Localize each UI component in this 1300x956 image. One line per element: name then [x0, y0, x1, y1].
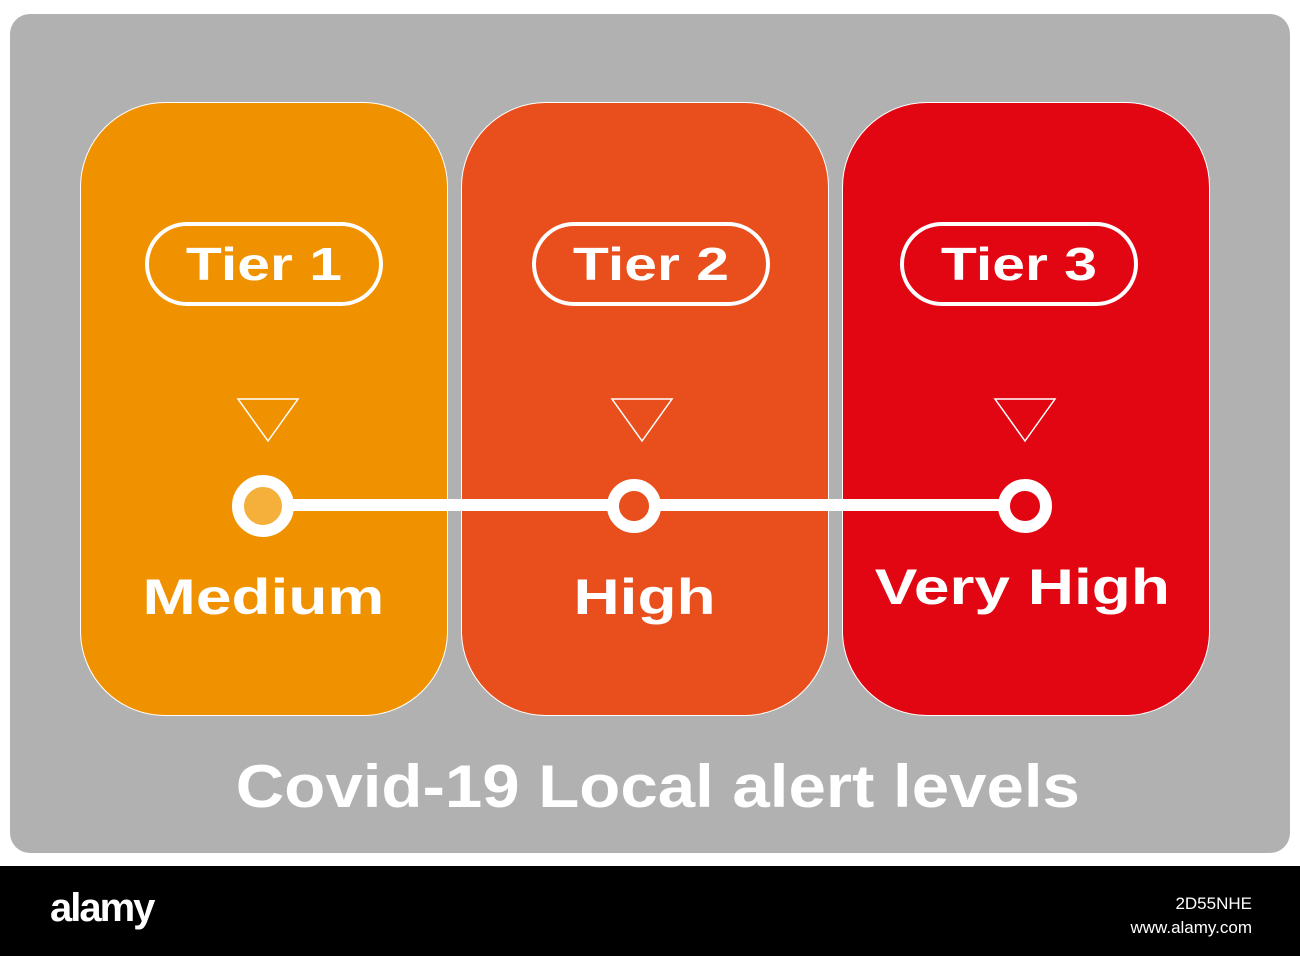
pill: Tier 2: Tier 2	[573, 238, 729, 290]
line	[238, 481, 1046, 531]
footer bar	[0, 866, 1300, 956]
pill: Tier 1	[145, 222, 383, 306]
pill: Tier 3: Tier 3	[941, 238, 1097, 290]
logo: alamy	[50, 886, 153, 930]
pill: Tier 1: Tier 1	[186, 238, 342, 290]
image id: 2D55NHE	[1175, 894, 1252, 913]
panel: tier 3	[842, 102, 1210, 716]
panel: tier 2	[461, 102, 829, 716]
pill: Tier 2	[532, 222, 770, 306]
image id	[1130, 894, 1252, 937]
label: Medium: Medium	[142, 569, 384, 625]
image id: www.alamy.com	[1130, 918, 1252, 937]
icon: triangles	[238, 399, 1055, 441]
panel: tier 1	[80, 102, 448, 716]
pill: Tier 3	[900, 222, 1138, 306]
title: Covid-19 Local alert levels	[236, 753, 1080, 820]
label: High: High	[574, 569, 716, 625]
label: Very High: Very High	[874, 559, 1170, 615]
